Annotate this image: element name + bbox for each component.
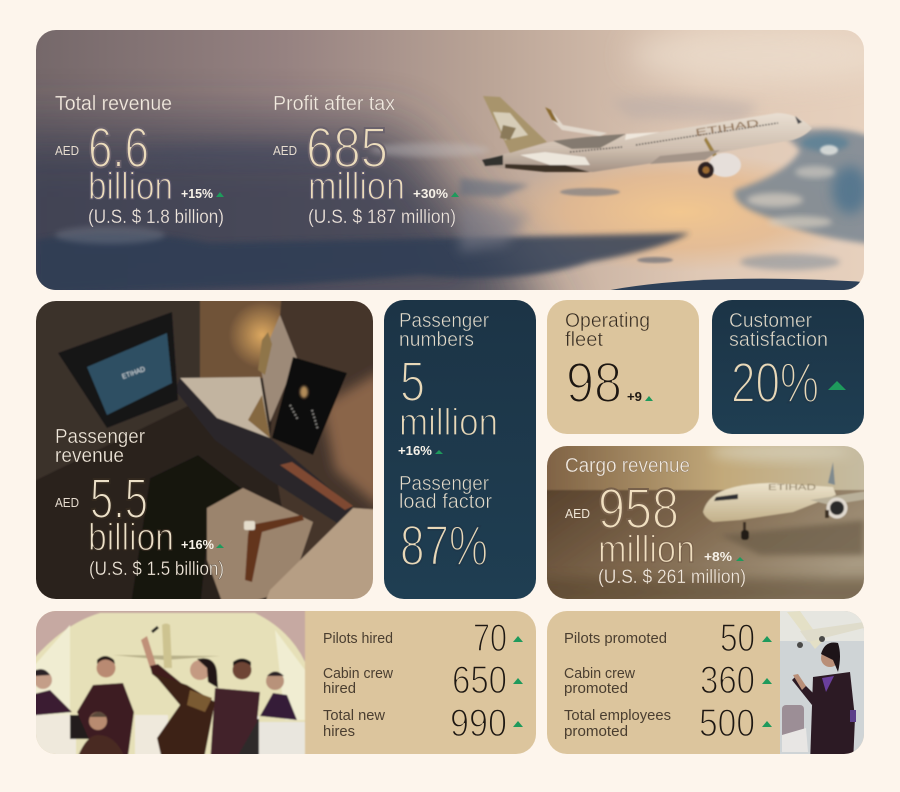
card background — [36, 611, 536, 754]
US dollar value: (U.S. $ 1.8 billion) — [88, 207, 224, 228]
currency: AED — [55, 143, 79, 158]
icon: up triangle — [828, 381, 846, 390]
card background — [547, 300, 699, 434]
panel: hires — [36, 611, 536, 754]
row: pilots promoted — [564, 617, 772, 660]
row: cabin crew promoted: 360 — [700, 659, 755, 702]
label: passenger revenue: Passenger — [55, 426, 145, 448]
row: total employees promoted: promoted — [564, 724, 628, 740]
value: 87%: 87% — [400, 514, 488, 578]
panel: cargo revenue — [547, 446, 864, 599]
card background — [712, 300, 864, 434]
panel: promotions — [547, 611, 864, 754]
image: flight attendant — [780, 611, 864, 754]
row: pilots hired: Pilots hired — [323, 631, 393, 647]
icon: up triangle — [435, 450, 443, 454]
row: total new hires: Total new — [323, 708, 386, 724]
icon: up triangle — [451, 192, 459, 197]
panel: customer satisfaction — [712, 300, 864, 434]
currency: AED — [565, 506, 590, 521]
panel: financial hero — [36, 30, 864, 290]
icon: up triangle — [645, 396, 653, 401]
image: aircraft above clouds — [36, 30, 864, 290]
row: total new hires: 990 — [450, 702, 507, 745]
currency: AED — [55, 495, 79, 510]
change: +16%: +16% — [181, 537, 214, 552]
label: operating fleet — [565, 310, 650, 351]
card background — [384, 300, 536, 599]
image: freighter on apron: ETIHAD — [768, 483, 816, 492]
icon: up triangle — [736, 557, 744, 561]
label: passenger revenue — [55, 426, 145, 467]
row: cabin crew promoted: Cabin crew — [564, 666, 636, 682]
metric: total revenue — [55, 93, 224, 228]
change: +30%: +30% — [413, 186, 448, 201]
card background — [547, 611, 864, 754]
value: 958: 958 — [598, 477, 679, 541]
label: passenger revenue: revenue — [55, 445, 124, 467]
label: customer satisfaction: Customer — [729, 310, 812, 332]
change: +8%: +8% — [704, 549, 732, 564]
label: operating fleet: Operating — [565, 310, 650, 332]
row: cabin crew hired — [323, 659, 523, 702]
value: 685: 685 — [306, 116, 388, 180]
image: crew group selfie — [36, 611, 306, 754]
label: operating fleet: fleet — [565, 329, 603, 351]
currency: AED — [273, 143, 297, 158]
value: 98: 98 — [566, 351, 622, 415]
row: total employees promoted — [564, 702, 772, 745]
value: 5.5: 5.5 — [90, 467, 148, 531]
icon: up triangle — [216, 192, 224, 197]
unit: billion: billion — [88, 166, 173, 208]
icon: up triangle — [216, 544, 224, 548]
label: passenger load factor: load factor — [399, 491, 492, 513]
value: 20%: 20% — [731, 351, 819, 415]
sub: aircraft: ETIHAD — [695, 118, 760, 139]
US dollar value: (U.S. $ 261 million) — [598, 567, 746, 588]
US dollar value: (U.S. $ 1.5 billion) — [89, 559, 224, 580]
panel: operating fleet — [547, 300, 699, 434]
row: cabin crew hired: 650 — [452, 659, 507, 702]
label: passenger load factor — [399, 473, 492, 513]
unit: billion: billion — [88, 517, 174, 559]
label: cargo revenue: Cargo revenue — [565, 455, 690, 477]
panel: passenger revenue — [36, 301, 373, 599]
row: cabin crew promoted — [564, 659, 772, 702]
label: passenger load factor: Passenger — [399, 473, 489, 495]
metric: profit after tax — [273, 93, 459, 228]
value: 6.6: 6.6 — [88, 116, 149, 180]
row: pilots promoted: 50 — [720, 617, 755, 660]
row: cabin crew hired: Cabin crew — [323, 666, 394, 682]
sub: people — [26, 627, 305, 764]
label: passenger numbers — [399, 310, 489, 351]
label: passenger numbers: Passenger — [399, 310, 489, 332]
row: cabin crew promoted: promoted — [564, 681, 628, 697]
sub: aircraft — [482, 96, 812, 178]
label: total revenue: Total revenue — [55, 93, 172, 115]
change: +16%: +16% — [398, 443, 432, 458]
row: pilots hired: 70 — [473, 617, 507, 660]
row: pilots hired — [323, 617, 523, 660]
panel: passenger numbers and load factor — [384, 300, 536, 599]
US dollar value: (U.S. $ 187 million) — [308, 207, 456, 228]
image: business class cabin: ETIHAD — [121, 366, 146, 381]
label: customer satisfaction: satisfaction — [729, 329, 828, 351]
row: total employees promoted: 500 — [699, 702, 755, 745]
unit: million: million — [598, 529, 695, 571]
row: total new hires — [323, 702, 523, 745]
row: total new hires: hires — [323, 724, 355, 740]
row: cabin crew hired: hired — [323, 681, 356, 697]
change: +9: +9 — [627, 389, 642, 404]
value: 5: 5 — [400, 350, 425, 414]
unit: million: million — [308, 166, 405, 208]
image: freighter on apron — [547, 446, 864, 599]
label: profit after tax: Profit after tax — [273, 93, 395, 115]
image: business class cabin — [36, 301, 373, 599]
change: +15%: +15% — [181, 186, 213, 201]
row: total employees promoted: Total employees — [564, 708, 671, 724]
unit: million: million — [399, 402, 498, 444]
label: passenger numbers: numbers — [399, 329, 474, 351]
row: pilots promoted: Pilots promoted — [564, 631, 667, 647]
label: customer satisfaction — [729, 310, 828, 351]
